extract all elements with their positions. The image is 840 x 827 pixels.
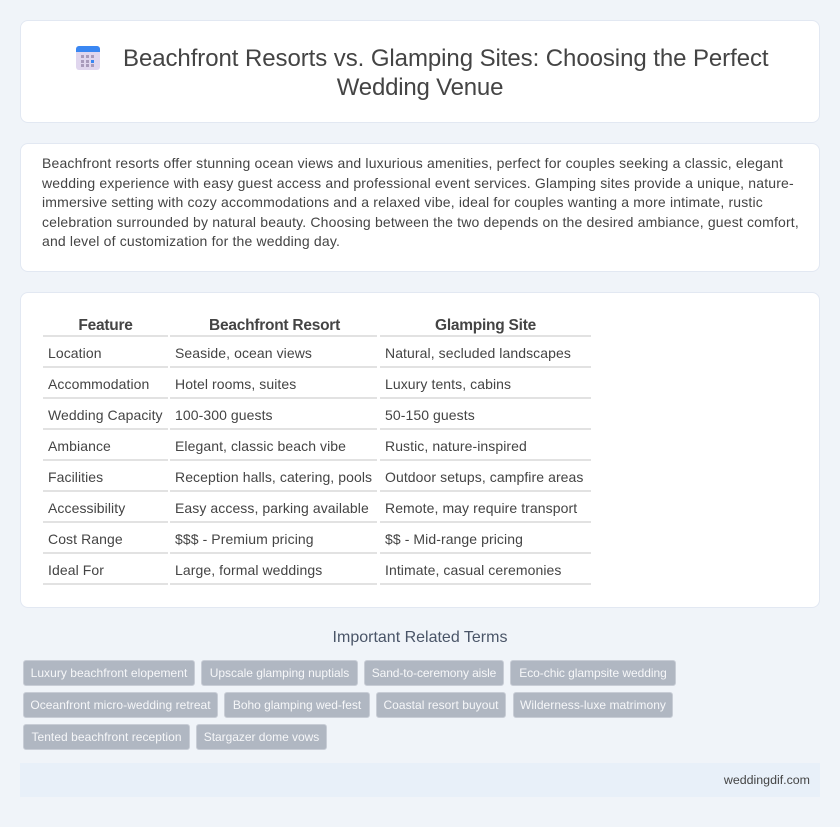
footer [20,763,820,797]
tag: Tented beachfront reception [31,730,182,744]
tag list: related terms [23,660,676,750]
text block: introduction: celebration surrounded by natural beauty. Choosing between the two depends on the desired ambiance, guest comfort, [42,214,799,230]
row: facilities: Reception halls, catering, pools [175,469,372,485]
panel: comparison table [20,292,820,608]
row: ideal for [48,562,561,578]
table header [78,317,536,334]
row: wedding capacity: 100-300 guests [175,407,273,423]
row: ideal for: Ideal For [48,562,104,578]
title: Beachfront Resorts vs. Glamping Sites: Choosing the Perfect [123,45,769,72]
tag: Coastal resort buyout [383,698,499,712]
row: accessibility [48,500,578,516]
tag: Oceanfront micro-wedding retreat [30,698,211,712]
tag [196,724,327,750]
row: facilities: Facilities [48,469,103,485]
text block: introduction: immersive setting with cozy accommodations and a relaxed vibe, ideal for couples wanting a more intimate, rustic [42,194,763,210]
tag: Sand-to-ceremony aisle [372,666,496,680]
row: ambiance [48,438,527,454]
tag [376,692,506,718]
tag [224,692,370,718]
row: ambiance: Elegant, classic beach vibe [175,438,346,454]
row: accessibility: Remote, may require transport [385,500,577,516]
tag [364,660,504,686]
row: location [48,345,571,361]
row: ideal for: Large, formal weddings [175,562,322,578]
tag: Wilderness-luxe matrimony [520,698,666,712]
footer text: weddingdif.com [724,773,810,787]
heading: important related terms: Important Related Terms [333,629,507,646]
row: facilities: Outdoor setups, campfire areas [385,469,584,485]
row: ideal for: Intimate, casual ceremonies [385,562,561,578]
row: cost range: Cost Range [48,531,123,547]
row: wedding capacity: 50-150 guests [385,407,475,423]
row: accommodation: Luxury tents, cabins [385,376,511,392]
row: wedding capacity [48,407,475,423]
row: accommodation: Accommodation [48,376,149,392]
row: location: Seaside, ocean views [175,345,312,361]
row: accessibility: Accessibility [48,500,125,516]
row: cost range: $$$ - Premium pricing [175,531,314,547]
tag [23,724,190,750]
tag [510,660,676,686]
table: comparison [43,317,591,585]
tag: Stargazer dome vows [204,730,319,744]
row: facilities [48,469,584,485]
table header: Glamping Site [435,317,536,334]
tag: Luxury beachfront elopement [31,666,187,680]
tag [23,692,218,718]
tag [23,660,195,686]
text block: introduction: and level of customization for the wedding day. [42,233,340,249]
row: accommodation [48,376,511,392]
row: ambiance: Ambiance [48,438,111,454]
icon: calendar [76,46,100,70]
tag [513,692,673,718]
row: cost range [48,531,523,547]
row: ambiance: Rustic, nature-inspired [385,438,527,454]
tag [201,660,358,686]
text block: introduction: wedding experience with easy guest access and professional event services. Glamping sites provide a unique, nature- [42,175,794,191]
row: accessibility: Easy access, parking available [175,500,369,516]
row: location: Location [48,345,102,361]
tag: Boho glamping wed-fest [233,698,361,712]
title [123,45,769,101]
title: Wedding Venue [337,74,503,101]
row: cost range: $$ - Mid-range pricing [385,531,523,547]
text block: introduction: Beachfront resorts offer stunning ocean views and luxurious amenities, perfect for couples seeking a classic, elegant [42,155,783,171]
table header: Feature [78,317,133,334]
row: wedding capacity: Wedding Capacity [48,407,163,423]
tag: Upscale glamping nuptials [210,666,349,680]
table header: Beachfront Resort [209,317,340,334]
row: location: Natural, secluded landscapes [385,345,571,361]
tag: Eco-chic glampsite wedding [519,666,667,680]
text block: introduction [42,155,799,249]
panel: header [20,20,820,123]
row: accommodation: Hotel rooms, suites [175,376,296,392]
panel: introduction [20,143,820,272]
